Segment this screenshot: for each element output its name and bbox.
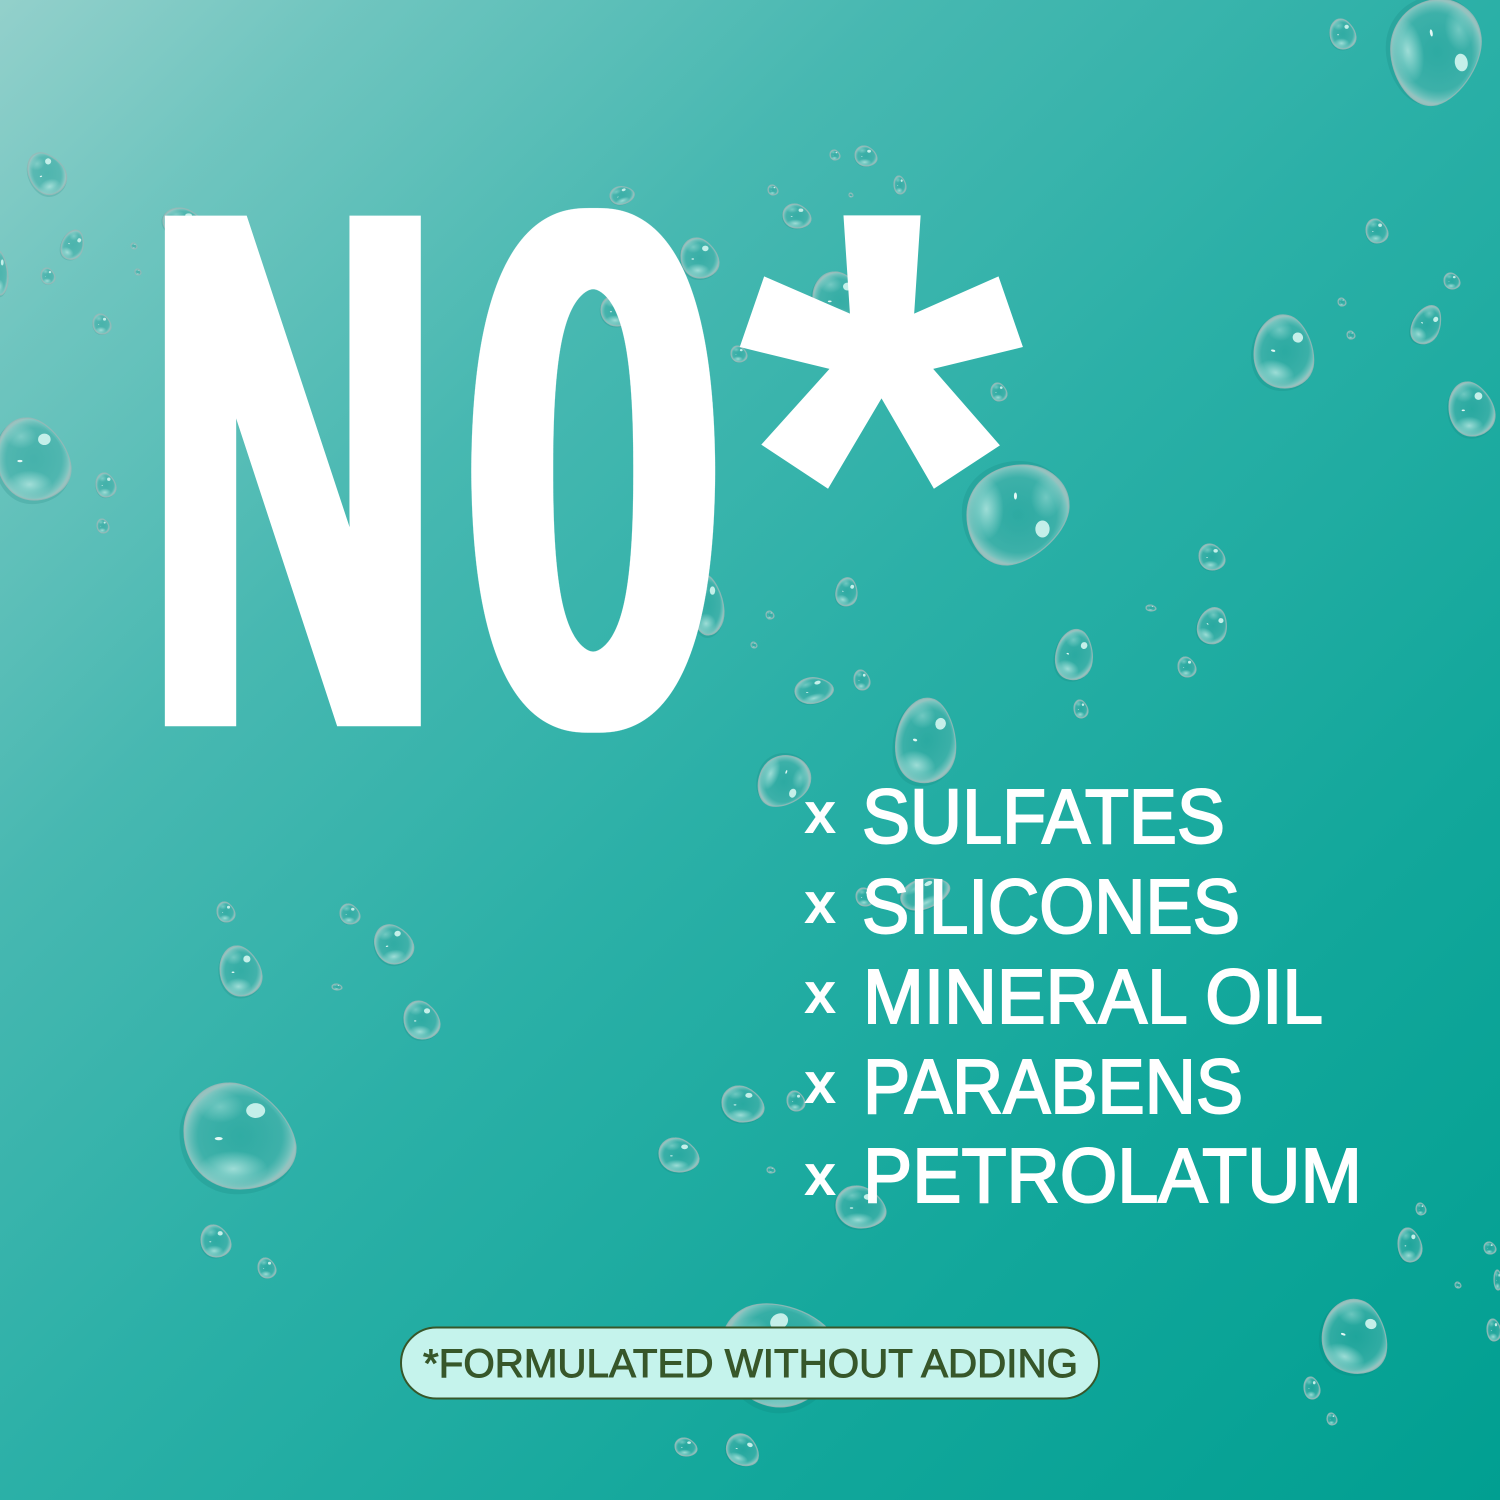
item: mineral oil: x	[804, 961, 836, 1026]
list of excluded ingredients	[804, 774, 1362, 1219]
item: parabens: x	[804, 1051, 836, 1116]
item: silicones: x	[804, 871, 836, 936]
item: petrolatum: PETROLATUM	[863, 1133, 1362, 1219]
item: mineral oil: MINERAL OIL	[863, 954, 1323, 1040]
title: NO*: N	[148, 83, 438, 856]
title: NO*: O	[459, 71, 728, 898]
item: parabens: PARABENS	[863, 1044, 1243, 1130]
item: sulfates: SULFATES	[862, 774, 1225, 860]
item: sulfates: x	[804, 781, 836, 846]
item: silicones: SILICONES	[862, 864, 1240, 950]
footnote pill: *FORMULATED WITHOUT ADDING	[423, 1342, 1078, 1386]
title: NO*	[148, 56, 1025, 898]
footnote pill	[401, 1328, 1099, 1398]
title: NO*: *	[738, 56, 1025, 877]
item: petrolatum: x	[804, 1143, 836, 1208]
